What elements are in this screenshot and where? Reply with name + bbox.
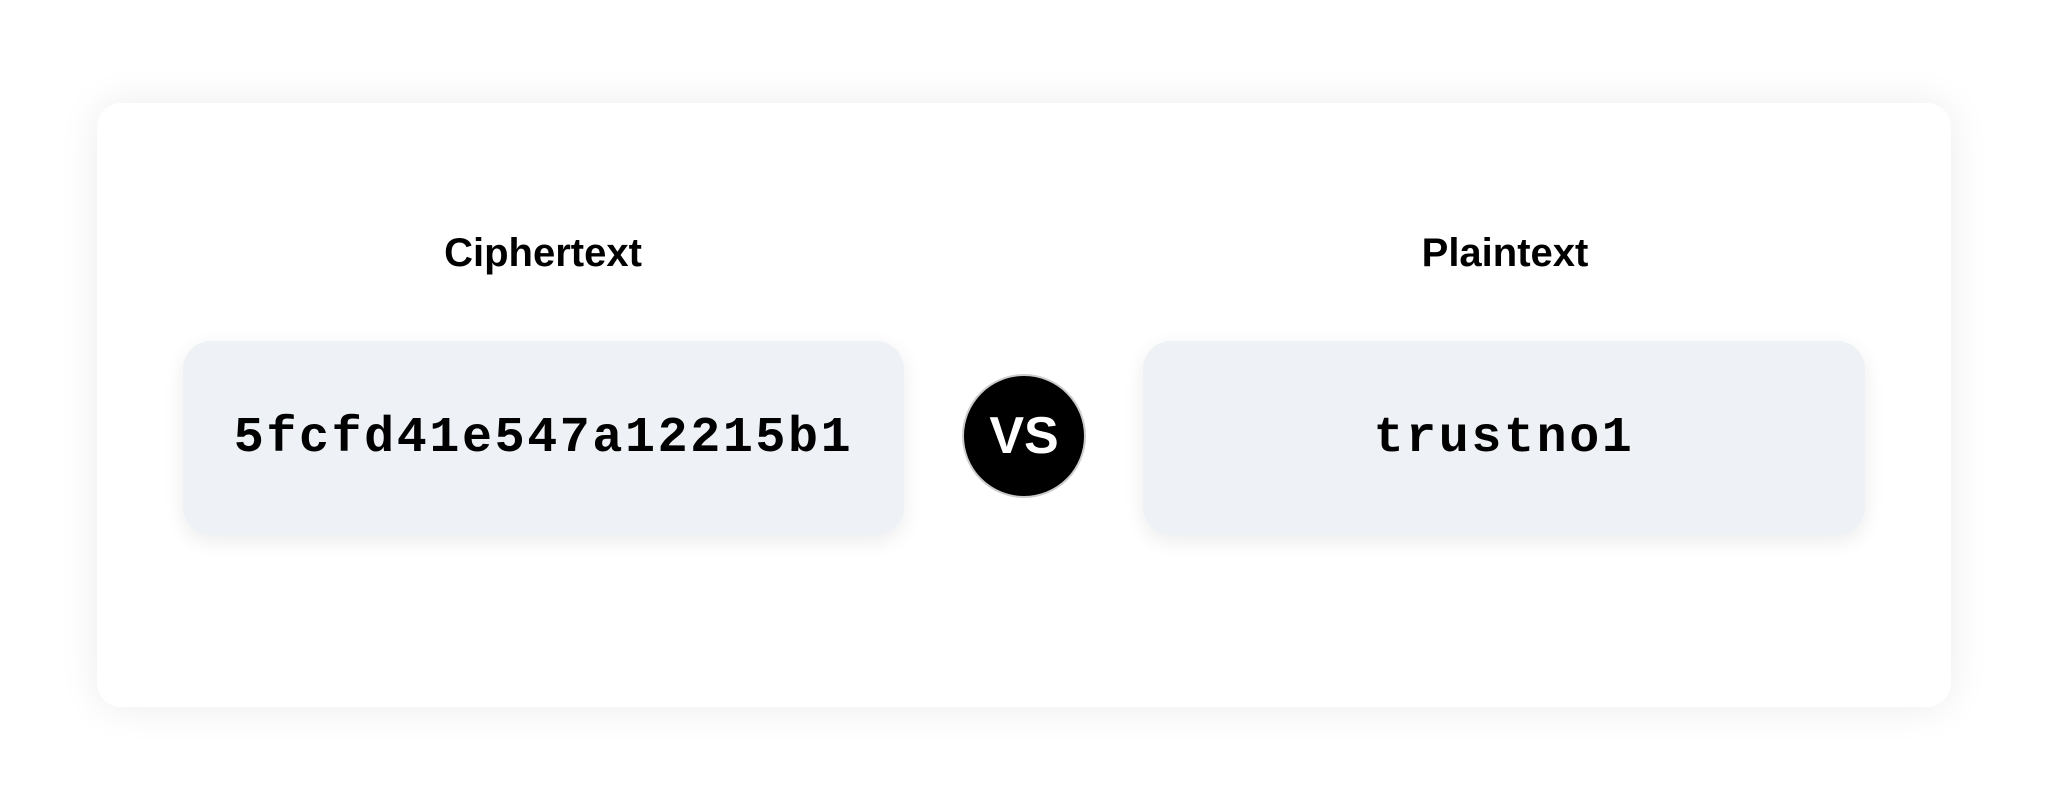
plaintext box — [1143, 341, 1865, 535]
card panel — [97, 103, 1951, 707]
heading: plaintext: Plaintext — [1422, 231, 1588, 275]
plaintext box: trustno1 — [1374, 410, 1634, 466]
vs badge: VS — [989, 407, 1059, 465]
vs badge — [962, 374, 1086, 498]
ciphertext box: 5fcfd41e547a12215b1 — [234, 410, 853, 466]
ciphertext box — [183, 341, 904, 535]
heading: ciphertext: Ciphertext — [444, 231, 642, 275]
